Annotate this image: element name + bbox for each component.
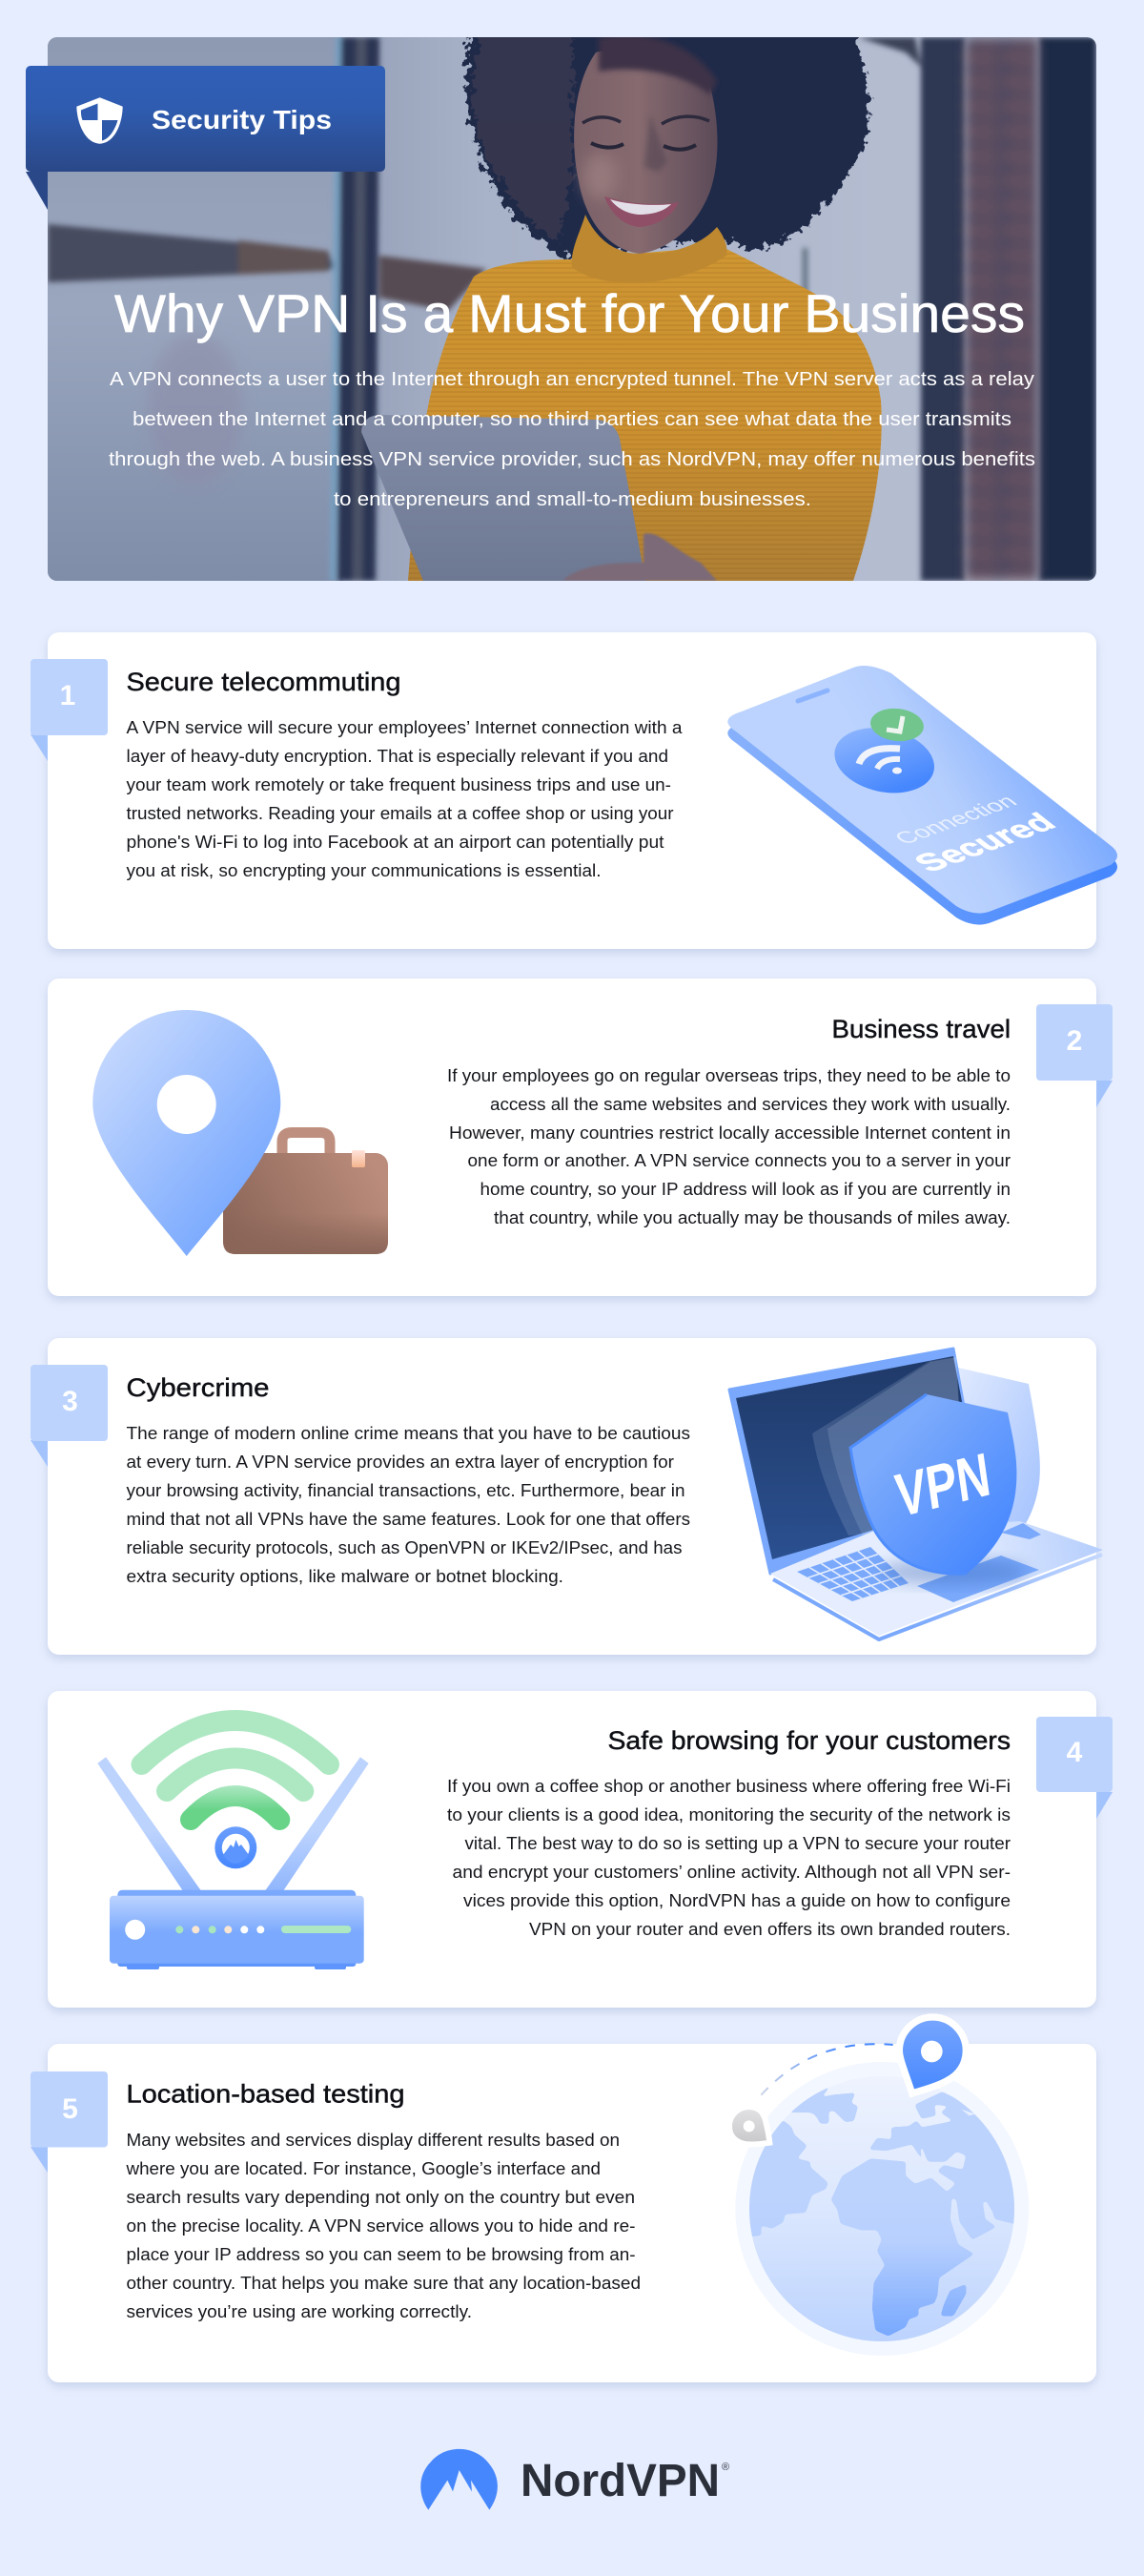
brick wall [965,37,1039,581]
body text: place your IP address so you can seem to be browsing from an- [126,2244,635,2264]
number badge 3: 3 [62,1386,78,1417]
body text: phone's Wi-Fi to log into Facebook at an airport can potentially put [126,832,664,852]
heading: Location-based testing [126,2079,404,2108]
sweater [408,246,882,581]
body text [447,1776,1011,1939]
hero intro paragraph [109,368,1035,510]
tablet [361,415,645,581]
number badge 1 [31,659,108,761]
illustration: laptop with VPN shield: VPN [891,1439,994,1531]
body text: where you are located. For instance, Google’s interface and [125,2158,601,2178]
body text: access all the same websites and services they work with usually. [490,1094,1011,1114]
NordVPN logo: ® [722,2462,729,2473]
illustration: phone connection secured [727,666,1117,925]
body text: Many websites and services display different results based on [126,2130,620,2150]
body text: If you own a coffee shop or another business where offering free Wi-Fi [447,1776,1011,1796]
panel: secure telecommuting [31,632,1117,949]
body text [126,717,683,880]
ribbon label: Security Tips [152,105,332,134]
body text: other country. That helps you make sure that any location-based [126,2273,641,2293]
body text: extra security options, like malware or botnet blocking. [126,1566,563,1586]
body text: The range of modern online crime means that you have to be cautious [126,1423,690,1443]
number badge 2: 2 [1067,1025,1082,1057]
heading: Secure telecommuting [126,668,400,696]
icon: blue pin [899,2017,966,2093]
icon: NordVPN circle [214,1826,256,1868]
body text: search results vary depending not only on the country but even [126,2187,635,2207]
body text: If your employees go on regular overseas trips, they need to be able to [447,1065,1011,1085]
body text: at every turn. A VPN service provides an extra layer of encryption for [126,1452,674,1472]
hero title: Why VPN Is a Must for Your Business [114,283,1025,343]
body text: and encrypt your customers’ online activity. Although not all VPN ser- [452,1862,1011,1882]
security tips ribbon [26,66,385,210]
hero intro paragraph: A VPN connects a user to the Internet through an encrypted tunnel. The VPN server acts as a relay [110,368,1035,390]
hair [461,37,874,259]
number badge 2 [1036,1004,1113,1107]
turtleneck collar [572,215,726,283]
number badge 4: 4 [1067,1737,1083,1768]
number badge 4 [1036,1717,1113,1819]
body text: that country, while you actually may be thousands of miles away. [494,1207,1011,1227]
hero photo: woman with tablet [48,0,1096,581]
icon: grey pin [729,2107,769,2145]
body text: vices provide this option, NordVPN has a guide on how to configure [463,1890,1011,1910]
illustration: wi-fi router [98,1721,368,1969]
icon: NordVPN mountain [420,2449,498,2510]
heading: Safe browsing for your customers [608,1726,1011,1755]
hero intro paragraph: through the web. A business VPN service provider, such as NordVPN, may offer numerous benefits [109,448,1035,470]
body text [126,1423,690,1586]
body text: trusted networks. Reading your emails at a coffee shop or using your [126,803,673,823]
body text: However, many countries restrict locally accessible Internet content in [449,1123,1011,1143]
body text: one form or another. A VPN service connects you to a server in your [467,1150,1011,1170]
heading: Business travel [831,1015,1011,1043]
heading: Cybercrime [126,1373,269,1402]
number badge 5: 5 [62,2093,78,2125]
body text: mind that not all VPNs have the same features. Look for one that offers [126,1509,690,1529]
hero intro paragraph: to entrepreneurs and small-to-medium businesses. [334,488,811,510]
body text: your team work remotely or take frequent business trips and use un- [126,774,671,794]
hero panel [48,0,1096,581]
hand [562,533,717,581]
panel: location-based testing [31,2017,1096,2382]
face [574,34,717,254]
panel: cybercrime [31,1338,1103,1655]
body text [125,2130,641,2321]
NordVPN logo: NordVPN [521,2456,720,2506]
illustration: location pin and briefcase [92,1010,388,1256]
number badge 1: 1 [60,680,75,711]
illustration: phone connection secured: Connection [889,792,1022,848]
body text: services you’re using are working correctly. [126,2301,472,2321]
dashed route [761,2044,893,2095]
body text: VPN on your router and even offers its own branded routers. [529,1919,1011,1939]
body text: on the precise locality. A VPN service allows you to hide and re- [126,2215,635,2236]
body text: vital. The best way to do so is setting up a VPN to secure your router [465,1833,1011,1853]
body text: your browsing activity, financial transactions, etc. Furthermore, bear in [126,1480,684,1500]
body text [447,1065,1011,1227]
number badge 5 [31,2071,108,2173]
body text: you at risk, so encrypting your communications is essential. [126,860,601,880]
body text: A VPN service will secure your employees’ Internet connection with a [126,717,683,737]
body text: home country, so your IP address will look as if you are currently in [480,1179,1011,1199]
body text: to your clients is a good idea, monitoring the security of the network is [447,1804,1011,1824]
illustration: globe with location pins [727,2017,1030,2356]
hero intro paragraph: between the Internet and a computer, so no third parties can see what data the user transmits [133,408,1011,430]
illustration: phone connection secured: Secured [906,808,1063,877]
panel: business travel [48,979,1113,1296]
body text: layer of heavy-duty encryption. That is especially relevant if you and [126,746,668,766]
icon: shield [76,97,123,144]
panel: safe browsing [48,1691,1113,2008]
number badge 3 [31,1365,108,1467]
illustration: laptop with VPN shield [729,1349,1103,1639]
NordVPN logo [420,2449,729,2510]
body text: reliable security protocols, such as OpenVPN or IKEv2/IPsec, and has [126,1537,682,1557]
